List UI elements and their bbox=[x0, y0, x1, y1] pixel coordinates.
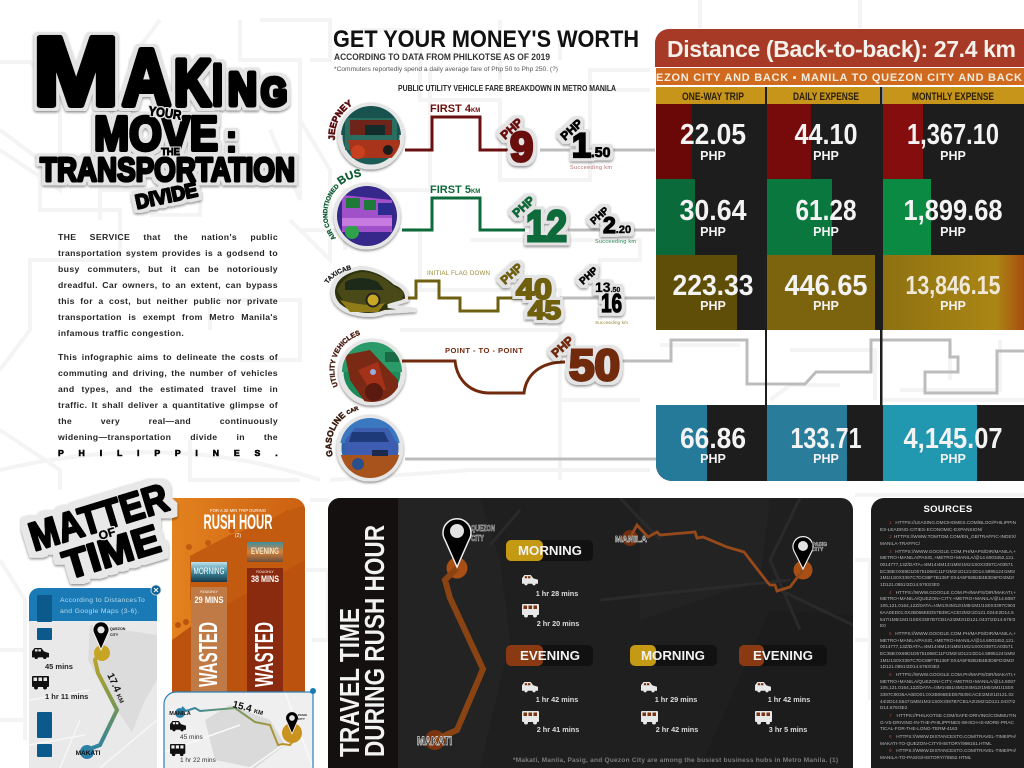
connector lines to table bbox=[405, 150, 1024, 459]
heading: rush hour bbox=[204, 508, 272, 539]
row: jeepney costs: 44.10 bbox=[794, 119, 858, 151]
time entry: evening jeepney and bus, Manila to Pasig: 3 hr 5 mins bbox=[769, 725, 807, 734]
section heading: get your money's worth: PUBLIC UTILITY VEHICLE FARE BREAKDOWN IN METRO MANILA bbox=[398, 84, 616, 93]
word: of: OF bbox=[97, 525, 117, 543]
pin: Quezon City: CITY bbox=[110, 633, 119, 637]
header: distance: Distance (Back-to-back): 27.4 km bbox=[667, 36, 1016, 62]
row: jeepney costs bbox=[656, 104, 999, 179]
time entry: morning jeepney and bus, Manila to Pasig: 2 hr 42 mins bbox=[656, 725, 698, 734]
fare: Php 9: 9 bbox=[510, 123, 533, 170]
jeepney time: 45 mins bbox=[180, 734, 204, 741]
panel: map Manila to Pasig bbox=[164, 688, 316, 768]
pin: Quezon City bbox=[443, 519, 495, 567]
icon: taxi sticker bbox=[324, 265, 418, 320]
pin: Pasig City: CITY bbox=[812, 547, 824, 553]
row: jeepney costs: PHP bbox=[700, 149, 726, 163]
main title: Making Your Move bbox=[33, 17, 295, 214]
fare: Php 12: PHP bbox=[510, 193, 537, 220]
pin: Quezon City: QUEZON bbox=[471, 523, 495, 533]
column headers: MONTHLY EXPENSE bbox=[912, 91, 994, 103]
icon: utility vehicle sticker: UTILITY VEHICLES bbox=[329, 330, 360, 388]
main title: Making Your Move: MOVE bbox=[94, 108, 218, 161]
bus time bbox=[32, 676, 88, 701]
pill: evening, Manila to Pasig: EVENING bbox=[753, 648, 813, 663]
intro text block: traffic. It shall deliver a quantitative glimpse of bbox=[58, 400, 278, 410]
row: taxi costs: 223.33 bbox=[672, 270, 754, 302]
time entry: evening jeepney and bus bbox=[522, 682, 579, 734]
intro text block: transportation system provides is a godsend to bbox=[58, 248, 278, 258]
label: succeeding km: Succeeding km bbox=[595, 320, 628, 326]
pin: Quezon City: QUEZON bbox=[110, 627, 126, 631]
fare: Php 50: 50 bbox=[569, 341, 620, 390]
intro text block: This infographic aims to delineate the costs of bbox=[58, 352, 278, 362]
fare: Php 13.50 to 16 succeeding bbox=[578, 265, 622, 318]
pill: evening, Manila to Pasig bbox=[739, 645, 827, 666]
placeholder blocks bbox=[37, 595, 52, 757]
label: point to point: POINT - TO - POINT bbox=[445, 346, 523, 355]
main title: Making Your Move: M bbox=[33, 17, 119, 126]
fare line: initial flag down bbox=[408, 281, 522, 311]
fare: Php 1.50 succeeding: 1.50 bbox=[572, 127, 611, 165]
fare: Php 9: PHP bbox=[498, 115, 525, 142]
panel: sources: 2 HTTPS://WWW.TOMTOM.COM/EN_GB/TRAFFIC-INDEX/MANILA-TRAFFIC/ bbox=[880, 534, 1016, 546]
fare: Php 2.20 succeeding bbox=[589, 205, 631, 238]
row: bus costs: PHP bbox=[813, 225, 839, 239]
intro text block: transportation is exempt from Metro Manila's bbox=[58, 312, 278, 322]
row: jeepney costs: 22.05 bbox=[680, 119, 746, 151]
pill: morning, Makati to Quezon City bbox=[506, 540, 593, 561]
fare row: gasoline car bbox=[325, 406, 406, 485]
time entry: evening jeepney and bus, Manila to Pasig: 1 hr 42 mins bbox=[768, 695, 810, 704]
row: taxi costs bbox=[656, 255, 1024, 330]
pin: Pasig City: CITY bbox=[298, 717, 305, 721]
jeepney time bbox=[32, 648, 73, 671]
panel: sources bbox=[871, 498, 1024, 768]
cost table panel bbox=[655, 29, 1024, 481]
pill: morning, Manila to Pasig: MORNING bbox=[641, 648, 705, 663]
fare: Php 2.20 succeeding: 2.20 bbox=[603, 212, 631, 238]
icon: gasoline car sticker: GASOLINE CAR bbox=[325, 406, 359, 457]
panel: travel time during rush hour bbox=[328, 498, 853, 768]
note: data source: According to DistancesTo bbox=[60, 597, 145, 604]
heading: travel time: DURING RUSH HOUR bbox=[359, 525, 390, 757]
panel: sources: 4 HTTPS://WWW.GOOGLE.COM.PH/MAPS/DIR/MAKATI,+METRO+MANILA/QUEZON+CITY,+METRO+MANILA/@14.6087105,121.0164,12Z/DATA=!4M13!4M12!1M5!1M1!1S0X3397C9036AA0ED01:0X2B066EED57B39CACE!2M2!1D121.0244!2D14.5547!1M5!1M1!1S0X3397B7CB1A2!2M2!1D121.0437!2D14.676!3E0 bbox=[880, 590, 1016, 628]
heading: rush hour: (2) bbox=[235, 533, 241, 539]
time entry: morning jeepney and bus bbox=[522, 575, 579, 628]
section heading: get your money's worth: ACCORDING TO DATA FROM PHILKOTSE AS OF 2019 bbox=[334, 52, 550, 63]
column headers bbox=[656, 87, 1024, 104]
main title: Making Your Move: : bbox=[225, 117, 238, 161]
heading: rush hour: FOR A 30 MIN TRIP DURING bbox=[210, 508, 266, 514]
panel: sources: 9 HTTPS://WWW.DISTANCESTO.COM/TRAVEL-TIME/PH/MANILA-TO-PASIG/HISTORY/78552.HTML bbox=[880, 748, 1016, 760]
fare: Php 40 to 45: 45 bbox=[528, 295, 561, 325]
fare row: jeepney bbox=[328, 99, 615, 173]
row: bus costs: PHP bbox=[940, 225, 966, 239]
fare: Php 12 bbox=[510, 193, 567, 251]
icon: bus sticker: AIR CONDITIONED BUS bbox=[322, 169, 362, 240]
intro text block bbox=[58, 232, 278, 458]
row: bus costs bbox=[656, 179, 1002, 255]
time entry: morning jeepney and bus: 2 hr 20 mins bbox=[537, 619, 579, 628]
jeepney time: 45 mins bbox=[45, 662, 73, 671]
route: 17.4 km bbox=[80, 645, 128, 759]
footnote: business hubs: *Makati, Manila, Pasig, and Quezon City are among the busiest business hubs in Metro Manila. (1) bbox=[513, 757, 838, 764]
icon: jeepney sticker: JEEPNEY bbox=[328, 99, 352, 140]
label: first 5 km: FIRST 5KM bbox=[430, 184, 480, 196]
fare row: air conditioned bus bbox=[322, 169, 636, 253]
fare: Php 9 bbox=[498, 115, 533, 170]
fare: Php 40 to 45: 40 bbox=[516, 274, 552, 306]
column headers: DAILY EXPENSE bbox=[793, 91, 859, 103]
evening bar: 38 mins wasted: EVENING bbox=[251, 546, 279, 557]
morning bar: 29 mins wasted: 29 MINS bbox=[194, 595, 224, 606]
row: taxi costs: PHP bbox=[700, 299, 726, 313]
intro text block: dreadful. Car owners, to an extent, can bypass bbox=[58, 280, 278, 290]
panel: map Makati to Quezon City bbox=[29, 585, 161, 768]
morning bar: 29 mins wasted: ROUGHLY bbox=[200, 590, 218, 594]
row: gasoline car costs bbox=[656, 405, 1024, 481]
label: succeeding km: Succeeding km bbox=[570, 165, 612, 171]
label: initial flag down: INITIAL FLAG DOWN bbox=[427, 270, 490, 277]
intro text block: this for a cost, but neither public nor private bbox=[58, 296, 278, 306]
intro text block: commuting and driving, the number of vehicles bbox=[58, 368, 278, 378]
route: 17.4 km: 17.4 KM bbox=[104, 672, 128, 705]
intro text block: widening—transportation divide in the bbox=[58, 432, 278, 442]
column headers: ONE-WAY TRIP bbox=[682, 91, 744, 103]
fare: Php 1.50 succeeding bbox=[558, 116, 611, 165]
intro text block: P H I L I P P I N E S . bbox=[58, 448, 278, 458]
close button bbox=[151, 585, 161, 595]
label: succeeding km: Succeeding km bbox=[595, 239, 636, 245]
time entry: morning jeepney and bus: 1 hr 28 mins bbox=[536, 589, 578, 598]
fare line: first 5 km bbox=[402, 198, 525, 230]
panel: sources: 7 HTTPS://PHILKOTSE.COM/SAFE-DRIVING/COMMUTING-VS-DRIVING-IN-THE-PHILIPPINES-WHICH-IS-MORE-PRACTICAL-FOR-THE-LONG-TERM-4163 bbox=[880, 713, 1016, 731]
row: jeepney costs: PHP bbox=[940, 149, 966, 163]
icon: taxi sticker: TAXICAB bbox=[324, 265, 352, 283]
row: gasoline car costs: PHP bbox=[940, 452, 966, 466]
bus time: 1 hr 11 mins bbox=[45, 692, 88, 701]
main title: Making Your Move: K bbox=[174, 46, 211, 119]
main title: Making Your Move: YOUR bbox=[148, 103, 183, 123]
route: 15.4 km bbox=[175, 699, 302, 745]
matter of time sticker: MATTER bbox=[24, 476, 174, 560]
label: Manila: MANILA bbox=[169, 711, 191, 717]
intro text block: busy commuters, but it can be notoriously bbox=[58, 264, 278, 274]
intro text block: infamous traffic congestion. bbox=[58, 328, 184, 338]
evening bar: 38 mins wasted bbox=[247, 542, 283, 693]
row: bus costs: 1,899.68 bbox=[904, 195, 1002, 227]
route: 15.4 km: 15.4 KM bbox=[231, 699, 265, 718]
pill: evening, Makati to Quezon City: EVENING bbox=[520, 648, 580, 663]
main title: Making Your Move: I bbox=[212, 53, 223, 118]
evening bar: 38 mins wasted: ROUGHLY bbox=[256, 570, 274, 574]
route: Quezon City to Makati bbox=[425, 558, 483, 750]
row: taxi costs: 446.65 bbox=[784, 270, 868, 302]
icon: bus sticker bbox=[322, 169, 402, 253]
panel: sources: 5 HTTPS://WWW.GOOGLE.COM.PH/MAPS/DIR/MANILA,+METRO+MANILA/PASIG,+METRO+MANILA/@14.6003452,121.0014777,13Z/DATA=!4M14!4M13!1M5!1M1!1S0X3397CA03571EC38B:0X69D1D5751068C11F!2M2!1D121!2D14.5995124!1M5!1M1!1S0X3397C7DC88F7B136F:0X4A5F92B2B4B3D6FD!2M2!1D121.0851!2D14.5763!3E2 bbox=[880, 631, 1016, 669]
intro text block: and types, and the estimated travel time in bbox=[58, 384, 278, 394]
section heading: get your money's worth: *Commuters reportedly spend a daily average fare of Php 50 to Php 250. (?) bbox=[334, 66, 558, 73]
main title: Making Your Move: N bbox=[228, 63, 257, 115]
row: gasoline car costs: 4,145.07 bbox=[904, 423, 1002, 455]
header: distance bbox=[655, 29, 1024, 67]
label: Makati: MAKATI bbox=[76, 750, 101, 757]
row: gasoline car costs: 66.86 bbox=[680, 423, 746, 455]
pin: Pasig City bbox=[286, 712, 308, 734]
row: bus costs: 61.28 bbox=[796, 195, 856, 227]
row: taxi costs: PHP bbox=[813, 299, 839, 313]
note: data source: and Google Maps (3-6). bbox=[60, 608, 139, 615]
panel: sources: SOURCES bbox=[923, 504, 973, 515]
main title: Making Your Move: TRANSPORTATION bbox=[40, 151, 295, 188]
fare: Php 40 to 45: PHP bbox=[498, 260, 525, 287]
row: taxi costs: PHP bbox=[940, 299, 966, 313]
jeepney time bbox=[170, 721, 204, 741]
fare: Php 40 to 45 bbox=[498, 260, 561, 325]
evening bar: 38 mins wasted: WASTED bbox=[249, 622, 279, 687]
section heading: get your money's worth: GET YOUR MONEY'S WORTH bbox=[333, 26, 639, 53]
fare: Php 13.50 to 16 succeeding: 16 bbox=[601, 288, 622, 318]
fare: Php 50: PHP bbox=[549, 333, 576, 360]
fare: Php 1.50 succeeding: PHP bbox=[558, 116, 585, 143]
pin: Pasig City: PASIG bbox=[298, 713, 308, 717]
time entry: evening jeepney and bus, Manila to Pasig bbox=[755, 682, 810, 734]
main title: Making Your Move: G bbox=[261, 71, 287, 114]
icon: utility vehicle sticker bbox=[329, 330, 408, 409]
morning bar: 29 mins wasted: WASTED bbox=[193, 622, 223, 687]
time entry: evening jeepney and bus: 2 hr 41 mins bbox=[537, 725, 579, 734]
corner dot bbox=[310, 688, 316, 694]
time entry: evening jeepney and bus: 1 hr 42 mins bbox=[536, 695, 578, 704]
main title: Making Your Move: DIVIDE bbox=[133, 179, 200, 214]
row: jeepney costs: PHP bbox=[813, 149, 839, 163]
fare: Php 12: 12 bbox=[526, 202, 567, 251]
pill: evening, Makati to Quezon City bbox=[506, 645, 593, 666]
column separators bbox=[765, 87, 882, 405]
panel: sources: 8 HTTPS://WWW.DISTANCESTO.COM/TRAVEL-TIME/PH/MAKATI-TO-QUEZON-CITY/HISTORY/998161.HTML bbox=[880, 734, 1016, 746]
row: bus costs: 30.64 bbox=[680, 195, 746, 227]
main title: Making Your Move: THE bbox=[161, 147, 180, 158]
pin: Quezon City bbox=[93, 622, 126, 650]
bus time bbox=[170, 744, 217, 764]
morning bar: 29 mins wasted: MORNING bbox=[194, 566, 224, 576]
section heading: get your money's worth bbox=[333, 26, 639, 93]
evening bar: 38 mins wasted: 38 MINS bbox=[251, 574, 279, 585]
row: gasoline car costs: PHP bbox=[700, 452, 726, 466]
row: gasoline car costs: PHP bbox=[813, 452, 839, 466]
row: bus costs: PHP bbox=[700, 225, 726, 239]
pill: morning, Makati to Quezon City: MORNING bbox=[518, 543, 582, 558]
heading: travel time: TRAVEL TIME bbox=[334, 608, 365, 757]
label: first 4 km: FIRST 4KM bbox=[430, 103, 480, 115]
time entry: morning jeepney and bus, Manila to Pasig bbox=[641, 682, 698, 734]
panel: sources: 6 HTTPS://WWW.GOOGLE.COM.PH/MAPS/DIR/MAKATI,+METRO+MANILA/QUEZON+CITY,+METRO+MANILA/@14.6087105,121.0164,12Z/DATA=!3M1!4B1!4M13!4M12!1M5!1M1!1S0X3397C9036AA0ED01:0X2B066EED57B39CACE!2M2!1D121.0244!2D14.5547!1M5!1M1!1S0X3397B7CB1A2!2M2!1D121.0437!2D14.676!3E2 bbox=[880, 672, 1016, 710]
matter of time sticker: TIME bbox=[58, 517, 165, 588]
intro text block: the very real—and continuously bbox=[58, 416, 278, 426]
fare: Php 13.50 to 16 succeeding: PHP bbox=[578, 265, 601, 287]
pin: Pasig City: PASIG bbox=[812, 542, 827, 548]
fare line: point to point bbox=[402, 361, 565, 393]
route: Manila to Pasig bbox=[622, 525, 812, 591]
pill: morning, Manila to Pasig bbox=[630, 645, 717, 666]
route ticker band: EZON CITY AND BACK ▪ MANILA TO QUEZON CITY AND BACK bbox=[656, 72, 1022, 84]
label: Makati: MAKATI bbox=[417, 734, 452, 748]
icon: jeepney sticker bbox=[328, 99, 406, 173]
row: jeepney costs: 1,367.10 bbox=[907, 119, 999, 151]
pin: Pasig City bbox=[793, 537, 827, 569]
fare line: first 4 km bbox=[405, 117, 512, 150]
heading: rush hour: RUSH HOUR bbox=[204, 511, 272, 534]
label: Manila: MANILA bbox=[615, 534, 647, 544]
fare: Php 50 bbox=[549, 333, 620, 390]
heading: travel time bbox=[334, 525, 390, 757]
row: taxi costs: 13,846.15 bbox=[906, 270, 1000, 300]
fare: Php 13.50 to 16 succeeding: 13.50 bbox=[595, 279, 620, 295]
matter of time sticker bbox=[24, 476, 185, 595]
pin: Quezon City: CITY bbox=[471, 533, 484, 543]
panel: rush hour bbox=[172, 498, 305, 693]
main title: Making Your Move: A bbox=[122, 33, 171, 122]
fare: Php 2.20 succeeding: PHP bbox=[589, 205, 612, 227]
time entry: morning jeepney and bus, Manila to Pasig: 1 hr 29 mins bbox=[655, 695, 697, 704]
fare row: taxicab bbox=[324, 260, 628, 326]
panel: sources: 3 HTTPS://WWW.GOOGLE.COM.PH/MAPS/DIR/MANILA,+METRO+MANILA/PASIG,+METRO+MANILA/@14.6003452,121.0014777,13Z/DATA=!4M14!4M13!1M5!1M1!1S0X3397CA03571EC38B:0X69D1D5751068C11F!2M2!1D121!2D14.5995124!1M5!1M1!1S0X3397C7DC88F7B136F:0X4A5F92B2B4B3D6FD!2M2!1D121.0851!2D14.5763!3E0 bbox=[880, 549, 1016, 587]
note: data source bbox=[60, 597, 145, 615]
panel: sources: 1 HTTPS://LEASING.DMCIHOMES.COM/BLOG/PHILIPPINES-LEADING-CITIES-ECONOMIC-EXPANSION/ bbox=[880, 520, 1016, 532]
fare row: utility vehicles bbox=[329, 330, 624, 409]
bus time: 1 hr 22 mins bbox=[180, 757, 217, 764]
intro text block: THE SERVICE that the nation's public bbox=[58, 232, 278, 242]
row: gasoline car costs: 133.71 bbox=[790, 423, 862, 455]
